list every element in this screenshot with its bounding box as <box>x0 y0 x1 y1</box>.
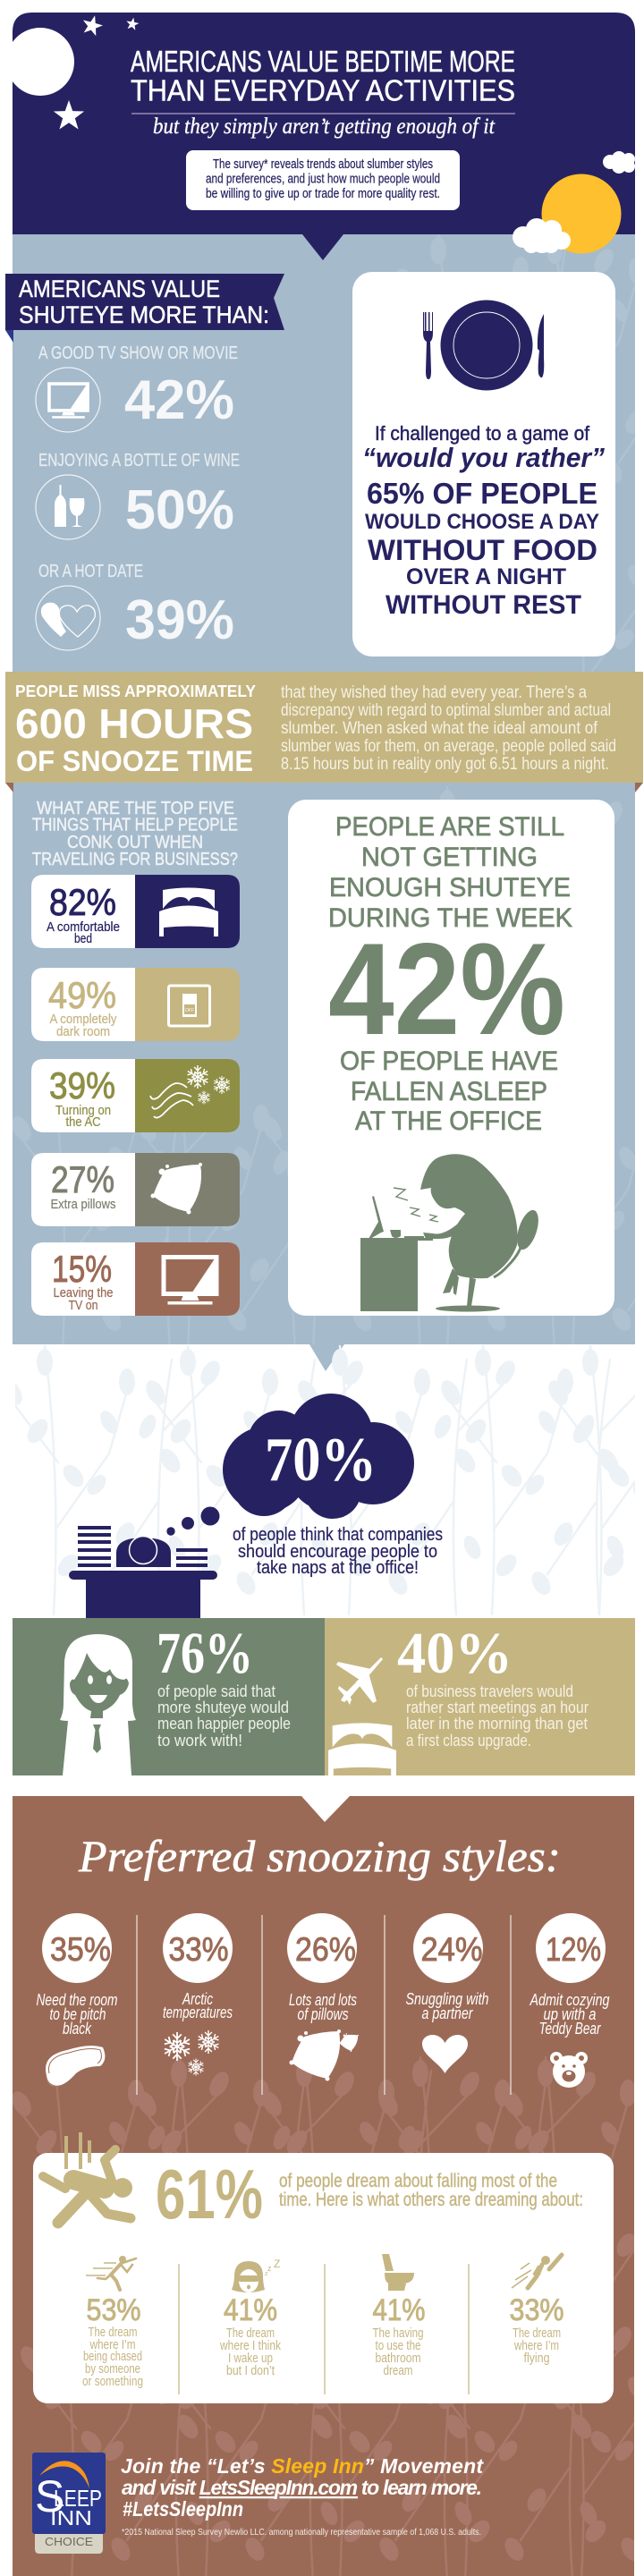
panel: still not getting enough shuteye <box>288 800 614 1316</box>
text: discrepancy paragraph: slumber. When asked what the ideal amount of <box>281 719 598 738</box>
icon: hearts <box>36 586 100 650</box>
icon: heart <box>422 2035 468 2073</box>
dream: flying: flying <box>524 2351 549 2366</box>
card: dark room: 49% <box>48 974 116 1016</box>
call to action <box>121 2454 484 2521</box>
icon: light switch: OFF <box>185 1008 194 1013</box>
style: teddy bear: Admit cozying <box>530 1991 610 2009</box>
style: arctic: temperatures <box>163 2004 233 2021</box>
text: fallen asleep: FALLEN ASLEEP <box>351 1077 547 1106</box>
style: pitch black: 35% <box>50 1931 111 1968</box>
dream: being chased: by someone <box>85 2361 140 2377</box>
icon: light switch <box>168 986 209 1026</box>
arrow: blue pointer <box>309 1344 344 1371</box>
dream: flying <box>510 2255 564 2366</box>
icon: sleeping woman <box>232 2258 280 2292</box>
card: extra pillows <box>31 1153 240 1226</box>
text: business travelers: later in the morning than get <box>406 1715 588 1733</box>
card: comfortable bed <box>31 875 240 948</box>
stat: hot date: 39% <box>125 589 234 651</box>
text: green headline: ENOUGH SHUTEYE <box>329 873 571 902</box>
panel: would you rather card <box>352 272 615 657</box>
dream: being chased <box>82 2256 143 2389</box>
icon: snowflakes <box>163 2030 220 2075</box>
icon: teddy bear <box>550 2052 588 2088</box>
text: business travelers: a first class upgrade. <box>406 1732 531 1750</box>
style: pillows <box>287 1913 359 2080</box>
card: leaving the TV on: TV on <box>68 1298 98 1313</box>
text: would you rather: WITHOUT FOOD <box>368 534 597 566</box>
dream: flying: where I’m <box>513 2338 559 2353</box>
text: falling dreams: of people dream about falling most of the <box>279 2171 557 2191</box>
style: pitch black: black <box>63 2020 92 2038</box>
style: pitch black: to be pitch <box>50 2005 106 2023</box>
dream: bathroom: dream <box>383 2363 413 2378</box>
icon: wine <box>36 475 100 539</box>
card: comfortable bed: A comfortable <box>47 919 120 935</box>
panel: header <box>6 13 635 260</box>
style: snuggling: Snuggling with <box>406 1990 488 2008</box>
text: green headline <box>328 812 572 933</box>
dream: being chased: where I’m <box>89 2337 136 2352</box>
style: pillows: Lots and lots <box>289 1991 357 2009</box>
dream: flying: The dream <box>513 2326 561 2341</box>
dream: being chased: The dream <box>88 2325 138 2340</box>
text: falling dreams <box>279 2171 583 2210</box>
text: 600 hours: PEOPLE MISS APPROXIMATELY <box>15 682 256 700</box>
text: fallen asleep: OF PEOPLE HAVE <box>340 1046 558 1076</box>
dream: wake up: I wake up <box>228 2351 273 2366</box>
icon: tv <box>161 1255 218 1304</box>
dream: wake up: 41% <box>224 2293 277 2327</box>
stat: hot date <box>36 562 234 651</box>
card: dark room: A completely <box>50 1012 117 1027</box>
style: teddy bear: 12% <box>546 1931 601 1968</box>
dream: bathroom: 41% <box>372 2293 426 2327</box>
dream: wake up <box>219 2258 281 2378</box>
card: leaving the TV on: Leaving the <box>54 1285 113 1301</box>
card: extra pillows: Extra pillows <box>50 1197 116 1212</box>
panel: preferred snoozing styles <box>8 1796 644 2576</box>
text: would you rather: “would you rather” <box>362 442 605 473</box>
style: arctic: 33% <box>168 1931 229 1968</box>
card: turning on the AC <box>31 1059 240 1132</box>
icon: bed <box>159 887 218 936</box>
callout: 70 percent think companies should encourage naps <box>69 1394 443 1618</box>
style: teddy bear: up with a <box>544 2005 596 2023</box>
icon: plate and cutlery <box>423 301 544 390</box>
dream: bathroom: The having <box>372 2326 424 2341</box>
logo: Sleep Inn: LEEP <box>54 2485 102 2512</box>
panel: 40 percent: 40% <box>397 1621 513 1686</box>
card: dark room <box>31 968 240 1041</box>
style: pillows: of pillows <box>297 2005 349 2023</box>
dream: wake up: but I don’t <box>226 2363 275 2378</box>
call to action: #LetsSleepInn <box>123 2497 243 2521</box>
text: business travelers: of business travelers would <box>406 1682 573 1700</box>
stat: tv show <box>36 343 238 432</box>
text: business travelers: rather start meetings an hour <box>406 1699 589 1716</box>
card: extra pillows: 27% <box>51 1158 114 1200</box>
card: leaving the TV on <box>31 1242 240 1316</box>
icon: stars <box>54 13 140 130</box>
text: green headline: PEOPLE ARE STILL <box>335 812 564 842</box>
text: happier people: mean happier people <box>157 1715 291 1733</box>
text: would you rather: WITHOUT REST <box>386 590 581 620</box>
text: business travelers <box>406 1682 589 1750</box>
heading: top five things <box>32 799 238 869</box>
card: turning on the AC: 39% <box>49 1064 115 1106</box>
icon: pillow <box>150 1163 202 1215</box>
text: would you rather: WOULD CHOOSE A DAY <box>365 510 599 534</box>
banner: 600 hours <box>5 672 643 792</box>
style: pitch black <box>36 1913 118 2086</box>
style: snuggling: 24% <box>420 1931 483 1968</box>
text: nap statement: of people think that companies <box>233 1525 443 1545</box>
heading: top five things: TRAVELING FOR BUSINESS? <box>32 850 238 869</box>
icon: person asleep at desk <box>360 1154 543 1311</box>
heading: top five things: CONK OUT WHEN <box>67 833 203 852</box>
banner: americans value shuteye: AMERICANS VALUE <box>19 275 220 302</box>
icon: moon <box>6 28 74 96</box>
text: fallen asleep: AT THE OFFICE <box>355 1106 542 1136</box>
call to action: Join the “Let’s Sleep Inn” Movement <box>121 2454 484 2478</box>
heading: Preferred snoozing styles: <box>78 1831 561 1881</box>
intro box: The survey* reveals trends about slumber styles <box>213 157 433 172</box>
callout: 70 percent think companies should encourage naps: 70% <box>265 1426 377 1495</box>
card: dark room: dark room <box>56 1024 110 1039</box>
text: discrepancy paragraph: that they wished they had every year. There’s a <box>281 683 587 702</box>
icon: thought cloud <box>223 1394 414 1519</box>
style: arctic: Arctic <box>182 1990 213 2008</box>
text: would you rather: If challenged to a game of <box>375 422 590 445</box>
panel: dreams card <box>33 2132 614 2403</box>
banner: americans value shuteye <box>5 274 284 343</box>
dream: wake up: The dream <box>226 2326 275 2341</box>
intro box: and preferences, and just how much people would <box>206 172 440 186</box>
dream: being chased: 53% <box>86 2293 141 2327</box>
icon: runner <box>86 2256 136 2290</box>
card: leaving the TV on: 15% <box>52 1248 112 1290</box>
dream: flying: 33% <box>510 2293 564 2327</box>
panel: 40 percent <box>325 1618 635 1779</box>
text: fallen asleep <box>340 1046 558 1136</box>
style: pitch black: Need the room <box>36 1991 118 2009</box>
text: happier people: more shuteye would <box>157 1699 289 1716</box>
intro box: be willing to give up or trade for more quality rest. <box>206 186 440 201</box>
style: snuggling <box>406 1913 488 2073</box>
text: green headline: NOT GETTING <box>361 843 538 872</box>
text: 600 hours <box>15 682 256 777</box>
logo: Sleep Inn: CHOICE <box>45 2535 93 2548</box>
stat: 61 percent: 61% <box>156 2155 263 2233</box>
text: would you rather <box>362 422 605 620</box>
subtitle: but they simply aren’t getting enough of it <box>153 114 496 139</box>
style: pillows: 26% <box>295 1931 356 1968</box>
arrow: header pointer <box>302 234 343 260</box>
title: THAN EVERYDAY ACTIVITIES <box>131 73 515 107</box>
icon: pillows <box>290 2029 359 2080</box>
text: happier people <box>157 1682 291 1750</box>
icon: falling person <box>43 2132 132 2223</box>
text: would you rather: 65% OF PEOPLE <box>367 477 597 510</box>
dream: wake up: where I think <box>219 2338 281 2353</box>
text: green headline: DURING THE WEEK <box>328 903 572 933</box>
icon: cold air <box>150 1065 231 1118</box>
icon: flying person <box>512 2255 562 2288</box>
dream: bathroom: to use the <box>376 2338 420 2353</box>
card: turning on the AC: the AC <box>66 1114 101 1130</box>
dream: bathroom: bathroom <box>376 2351 420 2366</box>
heading: top five things: THINGS THAT HELP PEOPLE <box>32 816 238 835</box>
intro box <box>186 150 460 210</box>
logo: Sleep Inn: S <box>35 2471 64 2521</box>
stat: 42 percent: 42% <box>328 916 565 1062</box>
icon: tv <box>36 368 100 432</box>
title <box>131 45 515 107</box>
text: happier people: of people said that <box>157 1682 275 1700</box>
text: would you rather: OVER A NIGHT <box>406 564 566 589</box>
logo: Sleep Inn <box>32 2453 106 2554</box>
icon: bed <box>328 1723 396 1779</box>
panel: 76 percent: 76% <box>157 1621 253 1686</box>
icon: toilet <box>382 2254 414 2291</box>
stat: wine <box>36 451 240 541</box>
panel: 76 percent <box>13 1618 325 1775</box>
style: snuggling: a partner <box>422 2004 473 2022</box>
icon: sleeping woman: z <box>265 2271 268 2277</box>
text: nap statement: should encourage people to <box>238 1542 437 1562</box>
logo: Sleep Inn: INN <box>50 2506 92 2529</box>
dream: being chased: or something <box>82 2374 143 2389</box>
dream: bathroom <box>372 2254 426 2378</box>
icon: sleep mask <box>46 2046 105 2086</box>
card: comfortable bed: 82% <box>49 881 116 923</box>
card: turning on the AC: Turning on <box>55 1103 111 1118</box>
text: happier people: to work with! <box>157 1732 242 1750</box>
icon: person napping at desk <box>69 1526 217 1618</box>
stat: tv show: A GOOD TV SHOW OR MOVIE <box>38 343 238 363</box>
icon: sleeping woman: Z <box>274 2258 280 2270</box>
dream: being chased: being chased <box>83 2349 142 2364</box>
panel: light blue section <box>8 234 644 1351</box>
text: nap statement <box>233 1525 443 1578</box>
icon: sleeping woman: z <box>267 2264 272 2273</box>
text: nap statement: take naps at the office! <box>257 1558 419 1578</box>
card: comfortable bed: bed <box>74 931 92 946</box>
arrow: white pointer <box>301 1796 350 1822</box>
style: teddy bear: Teddy Bear <box>538 2020 601 2038</box>
stat: wine: ENJOYING A BOTTLE OF WINE <box>38 451 240 470</box>
title: AMERICANS VALUE BEDTIME MORE <box>131 45 515 78</box>
stat: tv show: 42% <box>124 369 234 431</box>
text: discrepancy paragraph <box>281 683 616 774</box>
icon: sun and clouds <box>513 151 635 254</box>
icon: airplane <box>336 1657 383 1705</box>
style: teddy bear <box>530 1913 610 2088</box>
banner: americans value shuteye: SHUTEYE MORE THAN: <box>19 301 269 328</box>
heading: top five things: WHAT ARE THE TOP FIVE <box>37 799 234 818</box>
style: arctic <box>163 1913 233 2075</box>
footnote: *2015 National Sleep Survey Newlio LLC. among nationally representative sample of 1,068 U.S. adults. <box>122 2527 481 2538</box>
stat: hot date: OR A HOT DATE <box>38 562 143 581</box>
stat: wine: 50% <box>125 479 234 541</box>
icon: woman <box>60 1634 136 1775</box>
text: 600 hours: OF SNOOZE TIME <box>16 745 253 777</box>
text: 600 hours: 600 HOURS <box>15 700 253 747</box>
call to action: and visit LetsSleepInn.com to learn more. <box>122 2476 482 2499</box>
